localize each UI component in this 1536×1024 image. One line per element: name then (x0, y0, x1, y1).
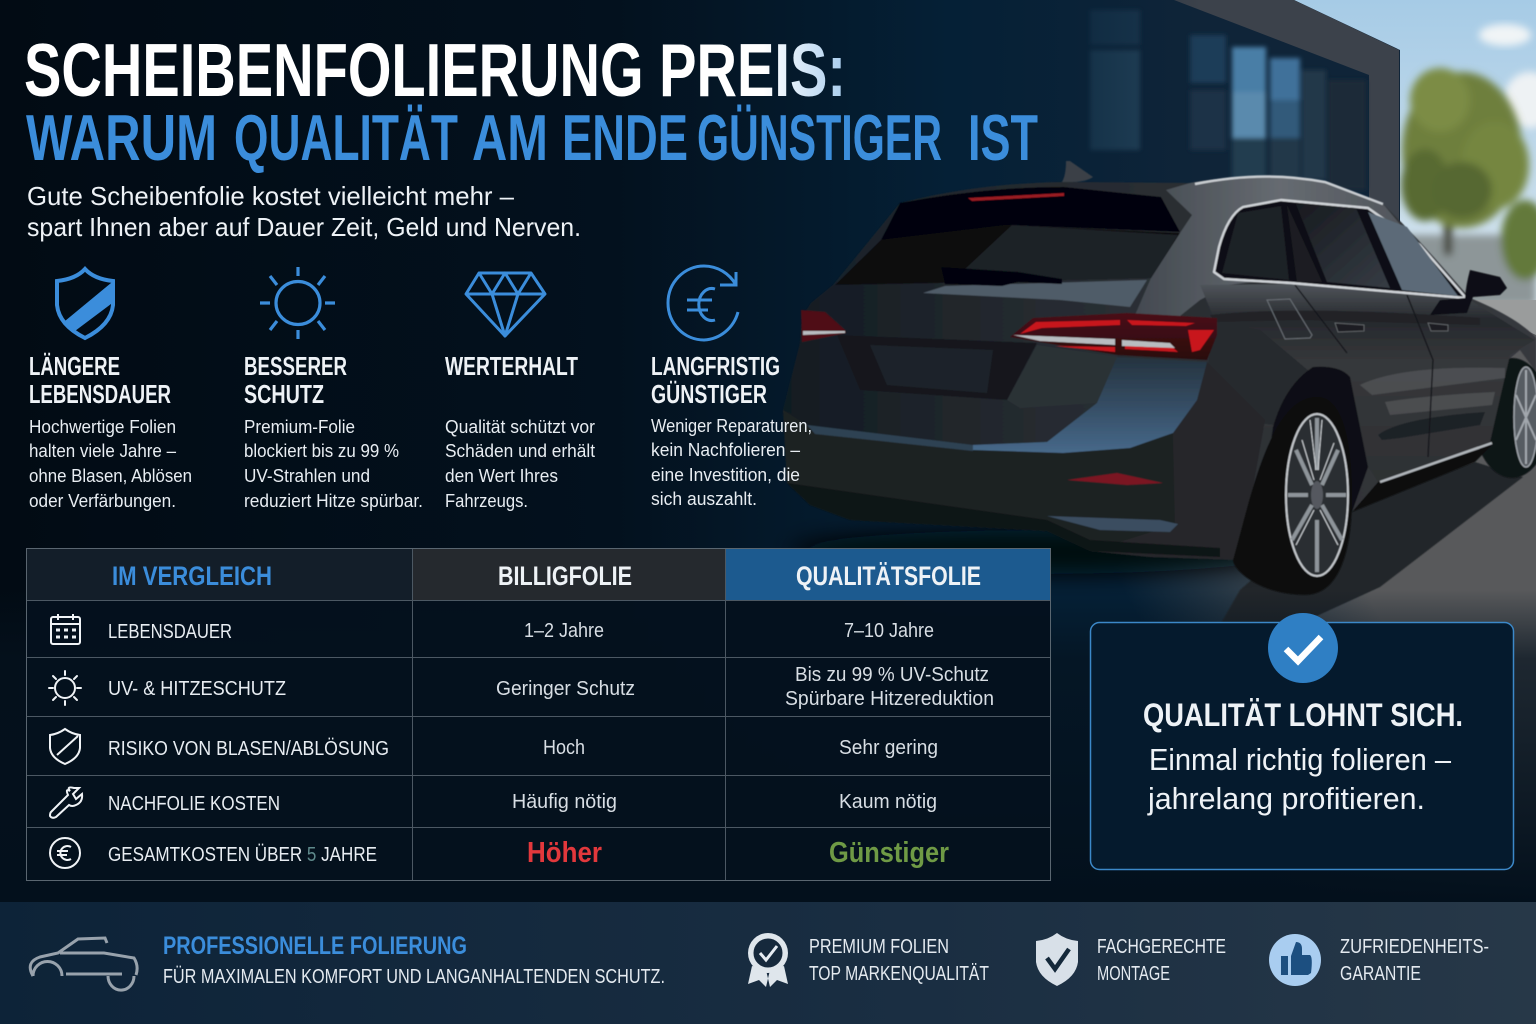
icon: medal (748, 933, 788, 987)
car photo (783, 161, 1536, 595)
text: halten viele Jahre – (29, 441, 176, 461)
car rear quarter highlight (972, 357, 1207, 453)
car roof and c-pillar (1130, 176, 1430, 340)
heading: SCHUTZ (244, 379, 324, 409)
feature: längere lebensdauer (29, 269, 192, 511)
subtitle: ENDE (562, 101, 688, 174)
car blue strip (807, 425, 973, 451)
text: Weniger Reparaturen, (651, 416, 812, 436)
heading: BESSERER (244, 351, 347, 381)
text: blockiert bis zu 99 % (244, 441, 399, 461)
row: uv- und hitzeschutz: Bis zu 99 % UV-Schutz (795, 664, 989, 686)
heading: LÄNGERE (29, 351, 120, 381)
icon: sun (49, 671, 81, 705)
feature: langfristig günstiger (651, 266, 812, 509)
row: risiko: RISIKO VON BLASEN/ABLÖSUNG (108, 738, 389, 760)
heading: LANGFRISTIG (651, 351, 780, 381)
callout: qualität lohnt sich: QUALITÄT LOHNT SICH. (1143, 697, 1463, 733)
callout: qualität lohnt sich (1090, 613, 1514, 870)
row: gesamtkosten: Höher (527, 837, 602, 869)
text: UV-Strahlen und (244, 466, 370, 486)
icon: thumbs up (1269, 934, 1321, 986)
footer heading (163, 932, 665, 988)
car roof rail (1195, 176, 1383, 204)
header: billigfolie: BILLIGFOLIE (498, 561, 632, 591)
text: Premium-Folie (244, 417, 355, 437)
callout: qualität lohnt sich: Einmal richtig folieren – (1149, 742, 1452, 777)
icon: wrench (50, 787, 82, 818)
feature: werterhalt (445, 273, 595, 511)
car mirror (1430, 270, 1507, 315)
car left tail light (801, 310, 846, 342)
text: Schäden und erhält (445, 441, 595, 461)
heading (29, 351, 171, 409)
car wheel arch (1260, 367, 1368, 560)
row: nachfolie kosten (50, 787, 937, 818)
text: sich auszahlt. (651, 489, 757, 509)
badge: premium folien: PREMIUM FOLIEN (809, 936, 949, 958)
badge: zufriedenheitsgarantie: ZUFRIEDENHEITS- (1340, 936, 1489, 958)
row: risiko: Sehr gering (839, 737, 938, 759)
header: im vergleich: IM VERGLEICH (112, 561, 272, 591)
table body (26, 548, 1050, 880)
subtitle: IST (968, 101, 1038, 174)
icon: calendar (51, 614, 80, 644)
intro text: Gute Scheibenfolie kostet vielleicht mehr – (27, 181, 515, 211)
row: gesamtkosten (50, 837, 949, 869)
car shadow (790, 530, 1290, 574)
car rear window (835, 225, 1180, 285)
car rear lower quarter (1090, 362, 1265, 560)
car door handles (1335, 323, 1448, 332)
row: lebensdauer: LEBENSDAUER (108, 621, 232, 643)
car lid highlight (923, 280, 1147, 307)
car plate recess (837, 335, 1037, 400)
icon: shield (57, 269, 113, 338)
header: qualitätsfolie: QUALITÄTSFOLIE (796, 561, 981, 591)
car sill (1352, 443, 1492, 512)
row: gesamtkosten: GESAMTKOSTEN ÜBER 5 JAHRE (108, 844, 377, 866)
text: den Wert Ihres (445, 466, 558, 486)
heading: LEBENSDAUER (29, 379, 171, 409)
row: uv- und hitzeschutz: Spürbare Hitzereduktion (785, 688, 994, 710)
text: oder Verfärbungen. (29, 491, 176, 511)
row: nachfolie kosten: Häufig nötig (512, 791, 617, 813)
text: reduziert Hitze spürbar. (244, 491, 423, 511)
icon: diamond (466, 273, 545, 336)
subtitle: AM (472, 101, 548, 174)
heading (651, 351, 780, 409)
text: eine Investition, die (651, 465, 800, 485)
car lower reflector (1067, 473, 1163, 485)
row: nachfolie kosten: NACHFOLIE KOSTEN (108, 793, 280, 815)
car right tail light (1010, 313, 1217, 360)
row: uv- und hitzeschutz: Geringer Schutz (496, 678, 635, 700)
car rear lid (783, 278, 1151, 447)
header: billigfolie (412, 549, 725, 600)
row: nachfolie kosten: Kaum nötig (839, 791, 937, 813)
header: qualitätsfolie (725, 549, 1050, 600)
badge: premium folien (748, 933, 989, 987)
car wiper (941, 267, 1062, 286)
title: SCHEIBENFOLIERUNG PREIS: (24, 28, 846, 112)
left fade overlay (960, 0, 1200, 330)
text: Fahrzeugs. (445, 491, 528, 511)
subtitle: WARUM (26, 101, 217, 174)
car rear spoiler (881, 187, 1180, 240)
car rear bumper (783, 410, 1175, 551)
row: lebensdauer: 7–10 Jahre (844, 620, 934, 642)
car lower trim (1047, 516, 1178, 532)
header: im vergleich (27, 549, 412, 600)
background: road (1060, 300, 1536, 902)
row: risiko: Hoch (543, 737, 585, 759)
car rear wheel (1233, 397, 1352, 595)
icon: car outline (30, 938, 137, 990)
text (244, 417, 423, 511)
icon: sun (260, 267, 335, 339)
car side windows (1214, 200, 1466, 298)
row: risiko (50, 729, 938, 764)
heading: GÜNSTIGER (651, 379, 767, 409)
row: uv- und hitzeschutz (49, 664, 994, 710)
text (29, 417, 192, 511)
icon: shield check (1036, 933, 1078, 986)
intro text: spart Ihnen aber auf Dauer Zeit, Geld und Nerven. (27, 212, 581, 242)
footer bar (0, 902, 1536, 1024)
text (445, 417, 595, 511)
background: tree (1400, 68, 1536, 305)
background: building (960, 0, 1400, 320)
row: uv- und hitzeschutz: UV- & HITZESCHUTZ (108, 678, 286, 700)
footer heading: PROFESSIONELLE FOLIERUNG (163, 932, 467, 960)
text (651, 416, 812, 509)
icon: euro (50, 838, 80, 868)
row: lebensdauer (51, 614, 934, 644)
icon: shield (50, 729, 80, 764)
footer heading: FÜR MAXIMALEN KOMFORT UND LANGANHALTENDEN SCHUTZ. (163, 966, 665, 988)
intro text (27, 181, 581, 242)
bottom fade over road (0, 590, 1536, 902)
row: lebensdauer: 1–2 Jahre (524, 620, 604, 642)
car front wheel (1474, 358, 1536, 478)
feature: besserer schutz (244, 267, 423, 511)
text: kein Nachfolieren – (651, 440, 800, 460)
callout: qualität lohnt sich: jahrelang profitieren. (1147, 781, 1425, 816)
row: gesamtkosten: Günstiger (829, 837, 949, 869)
heading (244, 351, 347, 409)
heading: WERTERHALT (445, 351, 578, 381)
subtitle: GÜNSTIGER (697, 101, 942, 174)
badge: zufriedenheitsgarantie: GARANTIE (1340, 963, 1421, 985)
car antenna (1062, 161, 1093, 182)
subtitle (26, 101, 1038, 174)
text: Qualität schützt vor (445, 417, 595, 437)
badge: fachgerechte montage: MONTAGE (1097, 963, 1170, 985)
subtitle: QUALITÄT (234, 101, 458, 174)
text: Hochwertige Folien (29, 417, 176, 437)
car lid reflection (1007, 345, 1117, 408)
car door panels (1200, 284, 1535, 482)
icon: euro cycle (668, 266, 738, 340)
badge: zufriedenheitsgarantie (1269, 934, 1489, 986)
text: ohne Blasen, Ablösen (29, 466, 192, 486)
car body (783, 176, 1536, 557)
comparison table (26, 548, 1050, 880)
badge: fachgerechte montage (1036, 933, 1226, 986)
badge: premium folien: TOP MARKENQUALITÄT (809, 963, 989, 985)
icon: check badge (1268, 613, 1338, 683)
badge: fachgerechte montage: FACHGERECHTE (1097, 936, 1226, 958)
